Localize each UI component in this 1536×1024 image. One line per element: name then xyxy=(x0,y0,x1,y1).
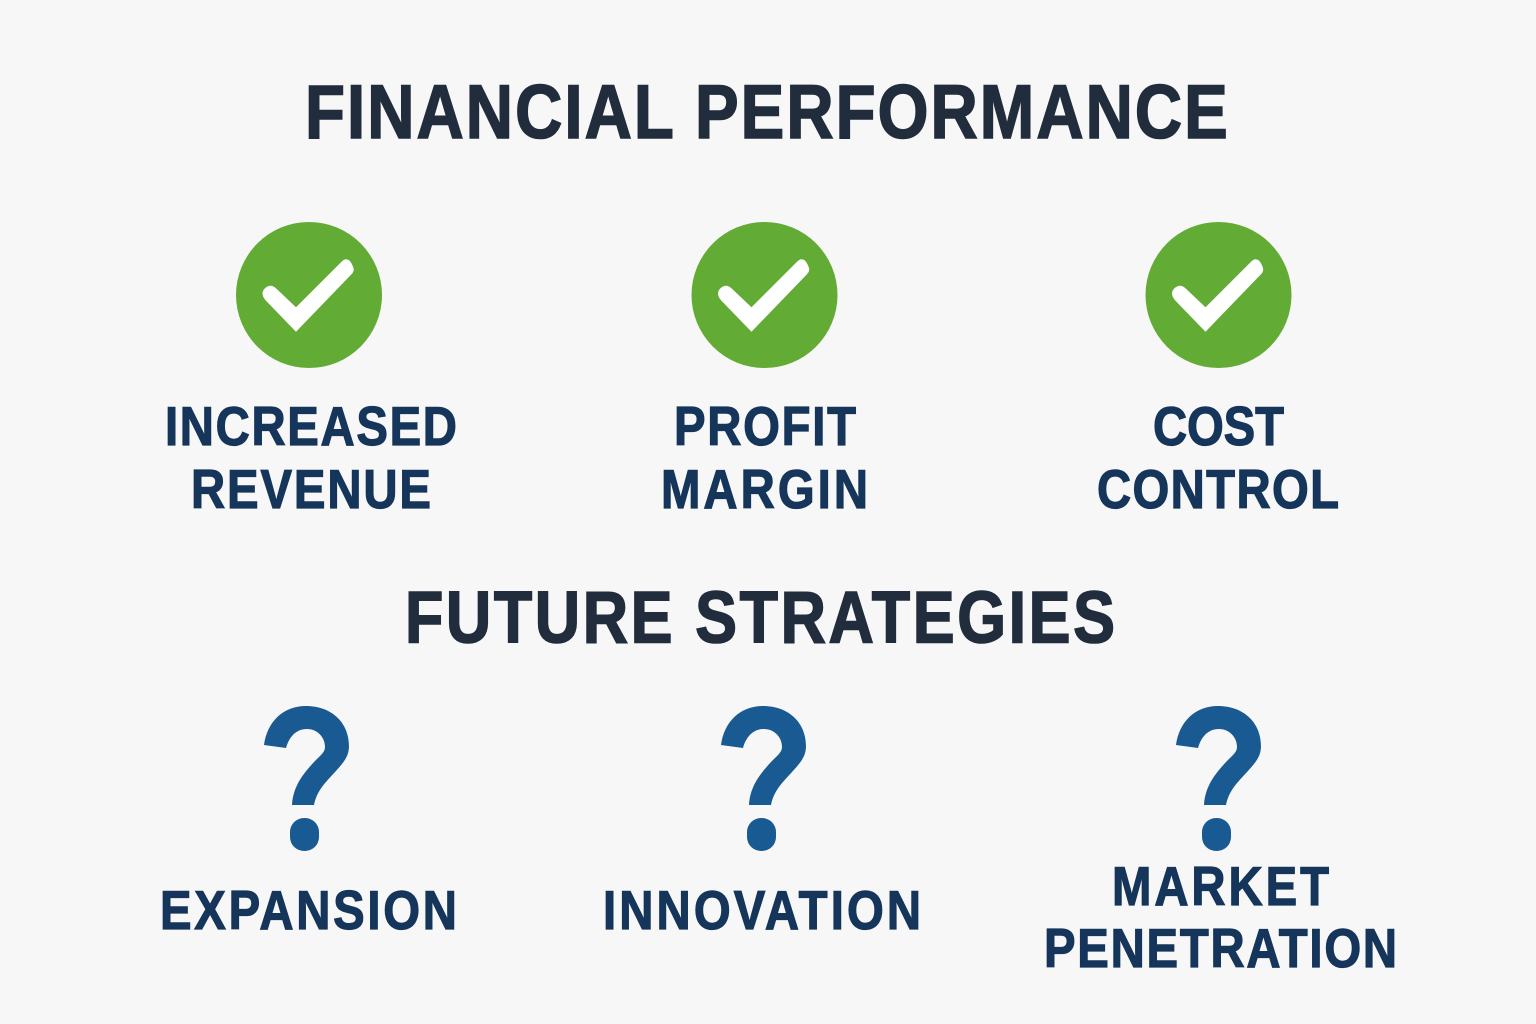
label: expansion: EXPANSION xyxy=(160,880,457,941)
label: cost control: CONTROL xyxy=(1097,459,1339,520)
label: profit margin xyxy=(661,396,868,520)
label: increased revenue: INCREASED xyxy=(165,396,457,457)
icon: question mark innovation xyxy=(721,706,806,851)
label: profit margin: PROFIT xyxy=(674,396,856,457)
label: cost control xyxy=(1097,396,1339,520)
panel: increased revenue xyxy=(165,222,457,520)
icon: question mark expansion xyxy=(264,706,349,851)
icon: question mark market penetration xyxy=(1176,706,1261,851)
panel: profit margin xyxy=(661,222,868,520)
panel: innovation xyxy=(603,706,921,941)
label: increased revenue: REVENUE xyxy=(191,459,431,520)
heading: future strategies: FUTURE STRATEGIES xyxy=(405,577,1115,659)
icon: green check increased revenue xyxy=(236,222,382,368)
label: market penetration xyxy=(1044,856,1397,979)
label: increased revenue xyxy=(165,396,457,520)
panel: market penetration xyxy=(1044,706,1397,979)
label: profit margin: MARGIN xyxy=(661,459,868,520)
label: innovation: INNOVATION xyxy=(603,880,921,941)
icon: green check cost control xyxy=(1146,222,1292,368)
title: financial performance: FINANCIAL PERFORMANCE xyxy=(305,70,1228,155)
panel: expansion xyxy=(160,706,457,941)
label: market penetration: PENETRATION xyxy=(1044,918,1397,979)
label: cost control: COST xyxy=(1153,396,1284,457)
label: market penetration: MARKET xyxy=(1112,856,1329,917)
panel: cost control xyxy=(1097,222,1339,520)
icon: green check profit margin xyxy=(692,222,838,368)
